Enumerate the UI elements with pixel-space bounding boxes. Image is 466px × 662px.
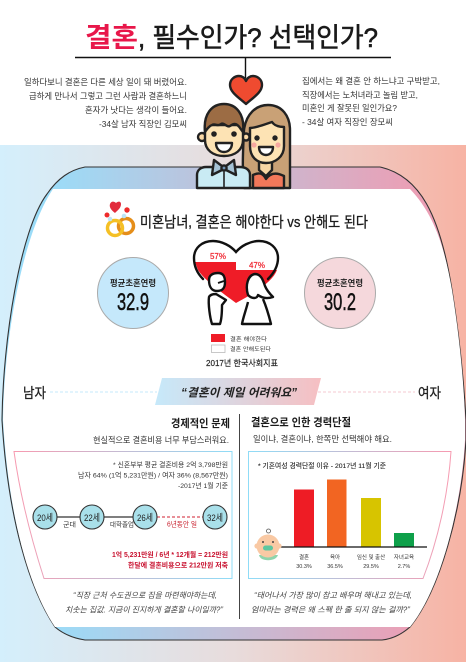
icon: wedding rings (104, 202, 134, 236)
bar chart: 2.7% (398, 564, 410, 570)
dashed connectors (50, 391, 157, 393)
cost note: -2017년 1월 기준 (178, 481, 228, 490)
bar chart: 결혼 (299, 553, 309, 561)
quote: man (24, 77, 187, 129)
quote: woman: - 34살 여자 직장인 장모씨 (302, 117, 393, 127)
bar chart: 육아 (330, 553, 340, 561)
timeline: 대학졸업 (110, 520, 134, 528)
timeline: 6년동안 일 (167, 520, 197, 528)
circle: male age (98, 258, 168, 328)
heading: survey: 미혼남녀, 결혼은 해야한다 vs 안해도 된다 (140, 214, 368, 231)
label: male: 남자 (23, 385, 46, 401)
box (14, 452, 232, 578)
main panel (2, 167, 466, 640)
man quote (65, 591, 223, 614)
title: , 필수인가? 선택인가? (138, 23, 378, 53)
quote: man: 일하다보니 결혼은 다른 세상 일이 돼 버렸어요. (24, 77, 187, 87)
quote: woman: 집에서는 왜 결혼 안 하느냐고 구박받고, (302, 76, 440, 86)
chart legend: 결혼 안해도된다 (230, 345, 272, 353)
cost note: 남자 64% (1억 5,231만원) / 여자 36% (8,567만원) (78, 470, 228, 480)
woman quote (251, 591, 412, 614)
bar chart: 29.5% (363, 564, 379, 570)
label: female: 여자 (418, 385, 441, 401)
quote: man: 혼자가 낫다는 생각이 들어요. (85, 105, 187, 115)
bar chart: 임신 및 출산 (357, 553, 385, 561)
timeline: 20세 (37, 513, 53, 524)
bar chart (270, 480, 427, 570)
quote: woman: 미혼인 게 잘못된 일인가요? (302, 103, 397, 113)
timeline: 26세 (137, 513, 153, 524)
heading: 경제적인 문제 (171, 416, 230, 430)
man quote: “직장 근처 수도권으로 집을 마련해야하는데, (73, 591, 217, 600)
timeline: 32세 (207, 513, 223, 524)
title: 결혼 (85, 23, 138, 53)
banner (155, 378, 321, 405)
circle: female age: 30.2 (324, 289, 356, 316)
quote: woman: 직장에서는 노처녀라고 놀림 받고, (302, 90, 418, 100)
bar chart: 자녀교육 (394, 553, 414, 561)
icon: woman silhouette (242, 274, 273, 324)
panel: economic problem (14, 416, 232, 614)
quote: woman (302, 76, 440, 127)
woman quote: 엄마라는 경력은 왜 스펙 한 줄 되지 않는 걸까?” (251, 606, 410, 614)
heart chart: 57% (210, 252, 226, 261)
timeline: 22세 (84, 513, 100, 524)
woman quote: “태어나서 가장 많이 참고 배우며 해내고 있는데, (254, 591, 412, 600)
subheading: 일이냐, 결혼이냐, 한쪽만 선택해야 해요. (253, 434, 392, 444)
banner: “결혼이 제일 어려워요” (181, 386, 297, 400)
circle: male age: 32.9 (117, 289, 149, 316)
subheading: 현실적으로 결혼비용 너무 부담스러워요. (93, 435, 229, 445)
icon: couple with heart (197, 76, 290, 188)
icon: baby (254, 529, 282, 560)
icon: heart (230, 76, 262, 104)
gradient background (0, 145, 466, 662)
heading: 결혼으로 인한 경력단절 (251, 415, 351, 429)
icon: man silhouette (209, 273, 226, 324)
chart legend: 결혼 해야한다 (230, 335, 268, 343)
man quote: 치솟는 집값. 지금이 진지하게 결혼할 나이일까?” (65, 606, 223, 614)
center divider (238, 414, 240, 619)
cost note (78, 460, 228, 490)
savings calculation: 1억 5,231만원 / 6년 * 12개월 = 212만원 (112, 550, 228, 559)
quote: man: -34살 남자 직장인 김모씨 (99, 119, 187, 129)
chart note: * 기혼여성 경력단절 이유 - 2017년 11월 기준 (258, 461, 386, 470)
icon: man (197, 104, 250, 188)
bar chart: 36.5% (327, 564, 343, 570)
savings calculation: 한달에 결혼비용으로 212만원 저축 (128, 560, 229, 570)
quote: man: 급하게 만나서 그렇고 그런 사람과 결혼하느니 (29, 91, 187, 101)
timeline (33, 505, 227, 529)
icon: woman (243, 105, 290, 188)
savings calculation (112, 550, 229, 570)
heart chart (194, 241, 278, 324)
cost note: * 신혼부부 평균 결혼비용 2억 3,798만원 (113, 460, 228, 469)
heart chart: 47% (249, 261, 265, 270)
source: 2017년 한국사회지표 (206, 358, 278, 368)
chart legend (211, 334, 272, 353)
circle: female age (304, 258, 376, 328)
panel: career break (248, 415, 451, 614)
box (248, 452, 451, 578)
circle: female age: 평균초혼연령 (317, 278, 363, 288)
timeline: 군대 (63, 520, 76, 528)
circle: male age: 평균초혼연령 (110, 278, 156, 288)
title rule and heart string (75, 58, 391, 78)
bar chart: 30.3% (296, 564, 312, 570)
